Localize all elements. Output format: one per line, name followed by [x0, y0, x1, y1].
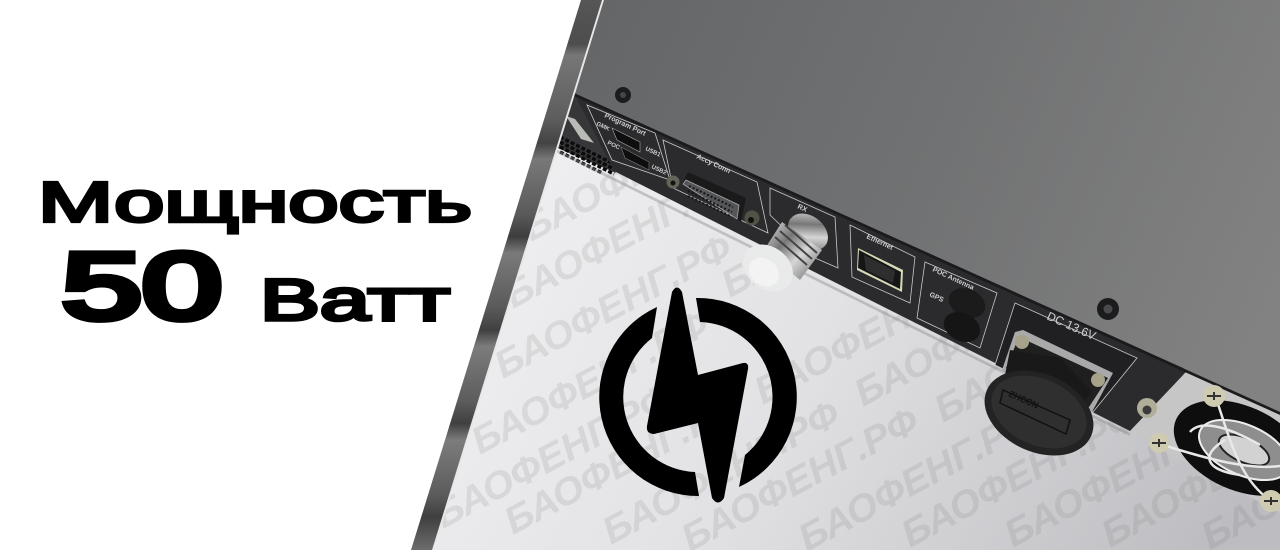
usb ports group: Program Port: [603, 112, 647, 138]
photo background with watermarks: БАОФЕНГ.РФ: [428, 377, 679, 537]
photo background with watermarks: БАОФЕНГ.РФ: [488, 227, 739, 387]
diagonal dark band: [411, 0, 603, 550]
heading: Ватт: Ватт: [260, 268, 450, 333]
rx antenna connector: RX: [796, 203, 808, 214]
photo background with watermarks: БАОФЕНГ.РФ: [516, 90, 767, 250]
device top surface: [570, 0, 1280, 414]
photo panel: radio rear view: [411, 0, 1280, 550]
band highlight line: [432, 0, 604, 550]
photo background with watermarks: БАОФЕНГ.РФ: [748, 253, 999, 413]
photo background with watermarks: БАОФЕНГ.РФ: [928, 271, 1179, 431]
rx antenna connector: [747, 187, 838, 286]
usb ports group: POC: [606, 140, 621, 152]
dc 13.6v power connector: ZHCCN: [1007, 389, 1040, 411]
usb ports group: [587, 105, 670, 180]
shadow under panel: [556, 149, 1130, 436]
d-sub accessory connector: Accy Conn: [695, 153, 731, 175]
usb ports group: USB2: [650, 164, 668, 177]
power lightning icon: [599, 288, 797, 502]
photo background with watermarks: БАОФЕНГ.РФ: [465, 303, 716, 463]
usb ports group: USB1: [644, 146, 662, 159]
ethernet port: Ethernet: [865, 233, 894, 252]
heading: 50: 50: [62, 234, 222, 338]
usb ports group: GMK: [595, 121, 611, 133]
top screws: [615, 87, 1119, 320]
heading: Мощность: Мощность: [38, 170, 472, 234]
cooling fan: [1168, 400, 1280, 496]
poc antenna and gps connectors: [917, 262, 997, 348]
photo background with watermarks: [434, 148, 1280, 550]
photo background with watermarks: БАОФЕНГ.РФ: [715, 146, 966, 306]
photo background with watermarks: БАОФЕНГ.РФ: [498, 157, 749, 317]
device rear panel: [574, 93, 1186, 431]
dc 13.6v power connector: [984, 302, 1138, 456]
silver rear fan plate: [1165, 373, 1280, 512]
photo background with watermarks: БАОФЕНГ.РФ: [596, 393, 847, 550]
d-sub accessory connector: [663, 140, 768, 233]
device side with vents and sticker: [553, 93, 616, 174]
photo background with watermarks: БАОФЕНГ.РФ: [848, 255, 1099, 415]
dc 13.6v power connector: DC 13.6V: [1045, 309, 1098, 343]
poc antenna and gps connectors: POC Antenna: [931, 266, 975, 292]
poc antenna and gps connectors: GPS: [928, 291, 945, 304]
ethernet port: [850, 225, 915, 303]
panel mount screws: [1137, 385, 1280, 512]
photo background with watermarks: БАОФЕНГ.РФ: [498, 383, 749, 543]
